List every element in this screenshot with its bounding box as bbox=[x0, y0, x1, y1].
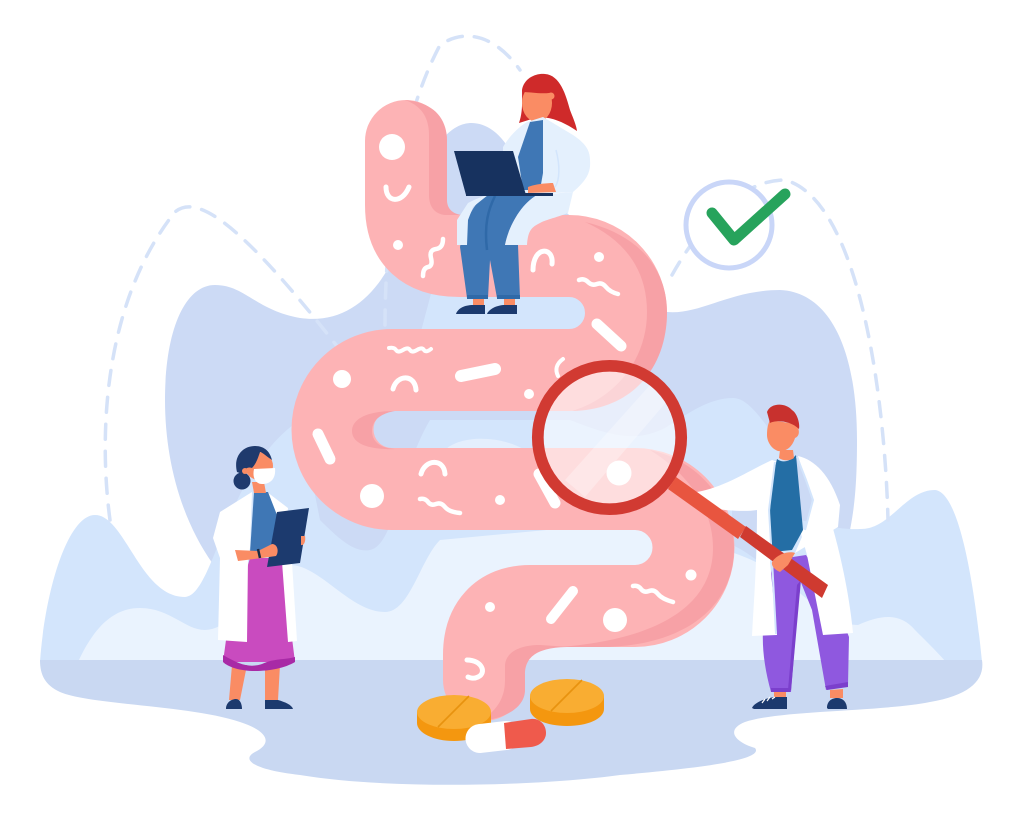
shoes bbox=[752, 697, 847, 709]
neck bbox=[532, 112, 545, 127]
shading stem bbox=[480, 645, 570, 721]
doctor left with clipboard bbox=[213, 446, 309, 709]
ankles bbox=[774, 689, 843, 698]
hair bun bbox=[234, 472, 250, 490]
skirt bbox=[223, 558, 295, 662]
bracelet bbox=[258, 549, 260, 558]
magnifier handle dark bbox=[740, 526, 828, 598]
face bbox=[245, 452, 273, 480]
orange tablet left bbox=[417, 695, 491, 741]
intestine body bbox=[333, 141, 694, 680]
magnifying glass lens bbox=[538, 366, 681, 509]
shoes bbox=[456, 305, 517, 314]
pale hump in gap bbox=[445, 439, 525, 450]
pale spot in lens bbox=[606, 460, 632, 486]
coat left bbox=[213, 492, 252, 642]
arm bbox=[235, 544, 278, 561]
face bbox=[522, 84, 552, 122]
dashed arcs bbox=[105, 36, 888, 520]
right lower coat bbox=[800, 525, 853, 635]
ground bbox=[40, 660, 982, 785]
coat skirt left bbox=[457, 195, 488, 245]
check mark bbox=[712, 194, 785, 240]
coat right bbox=[267, 492, 297, 642]
neck bbox=[779, 450, 794, 460]
shading lower right bend bbox=[560, 450, 734, 647]
shirt bbox=[250, 492, 277, 553]
intestine bbox=[318, 100, 734, 721]
coat edge shadow bbox=[769, 457, 813, 634]
skirt hem bbox=[223, 655, 295, 671]
left dashed arc bbox=[105, 207, 340, 520]
curved and rod bacteria bbox=[318, 187, 673, 678]
pants hem bbox=[771, 580, 848, 692]
right hand bbox=[301, 536, 305, 545]
pants bbox=[763, 555, 849, 692]
lens glare bbox=[565, 385, 668, 497]
neck bbox=[252, 482, 266, 493]
magnifier handle light bbox=[668, 477, 746, 539]
badge ring bbox=[686, 182, 772, 268]
lavender blob bbox=[165, 123, 857, 630]
shirt bbox=[518, 120, 543, 190]
icon: check badge bbox=[686, 182, 785, 268]
round spots bbox=[333, 134, 696, 632]
laptop screen bbox=[454, 151, 526, 195]
right sleeve bbox=[795, 456, 840, 553]
lavender wedge beside doctor bbox=[732, 505, 770, 568]
background scenery bbox=[40, 123, 982, 785]
arm line bbox=[555, 150, 559, 187]
ear bbox=[548, 92, 554, 100]
gap fill under top bend bbox=[420, 290, 600, 335]
hand bbox=[772, 552, 795, 572]
trouser cuffs bbox=[467, 295, 520, 299]
bacteria spots bbox=[318, 134, 696, 678]
shading right bend bbox=[572, 222, 667, 411]
shoes bbox=[226, 699, 293, 709]
legs bbox=[229, 665, 280, 700]
rim bbox=[538, 366, 681, 509]
shading top bbox=[405, 100, 462, 215]
lens bbox=[544, 372, 676, 504]
laptop base bbox=[466, 193, 553, 196]
head bbox=[767, 420, 799, 451]
hand bbox=[528, 183, 556, 193]
ankles bbox=[473, 299, 515, 305]
pills bbox=[417, 679, 604, 749]
doctor right with magnifier bbox=[668, 405, 853, 709]
right dashed arc bbox=[672, 180, 888, 520]
hair bbox=[236, 446, 272, 475]
hair bbox=[767, 405, 799, 429]
coat skirt right bbox=[505, 192, 573, 245]
doctor top with laptop bbox=[454, 74, 590, 314]
clipboard bbox=[267, 508, 309, 567]
shirt bbox=[770, 455, 803, 552]
shading inner left bend bbox=[352, 411, 395, 449]
outstretched arm and left coat bbox=[697, 460, 778, 636]
orange tablet right bbox=[530, 679, 604, 726]
capsule bbox=[480, 719, 546, 749]
pale foreground hills bbox=[78, 525, 946, 662]
shoe laces bbox=[762, 697, 775, 703]
leg crease bbox=[486, 196, 495, 250]
middle dashed arc bbox=[385, 36, 520, 325]
legs bbox=[460, 195, 537, 298]
ear bbox=[242, 468, 248, 474]
bangs bbox=[522, 77, 553, 93]
mask bbox=[253, 468, 275, 484]
light blue hills bbox=[40, 398, 982, 662]
hair bbox=[519, 74, 577, 131]
coat upper bbox=[503, 117, 590, 195]
